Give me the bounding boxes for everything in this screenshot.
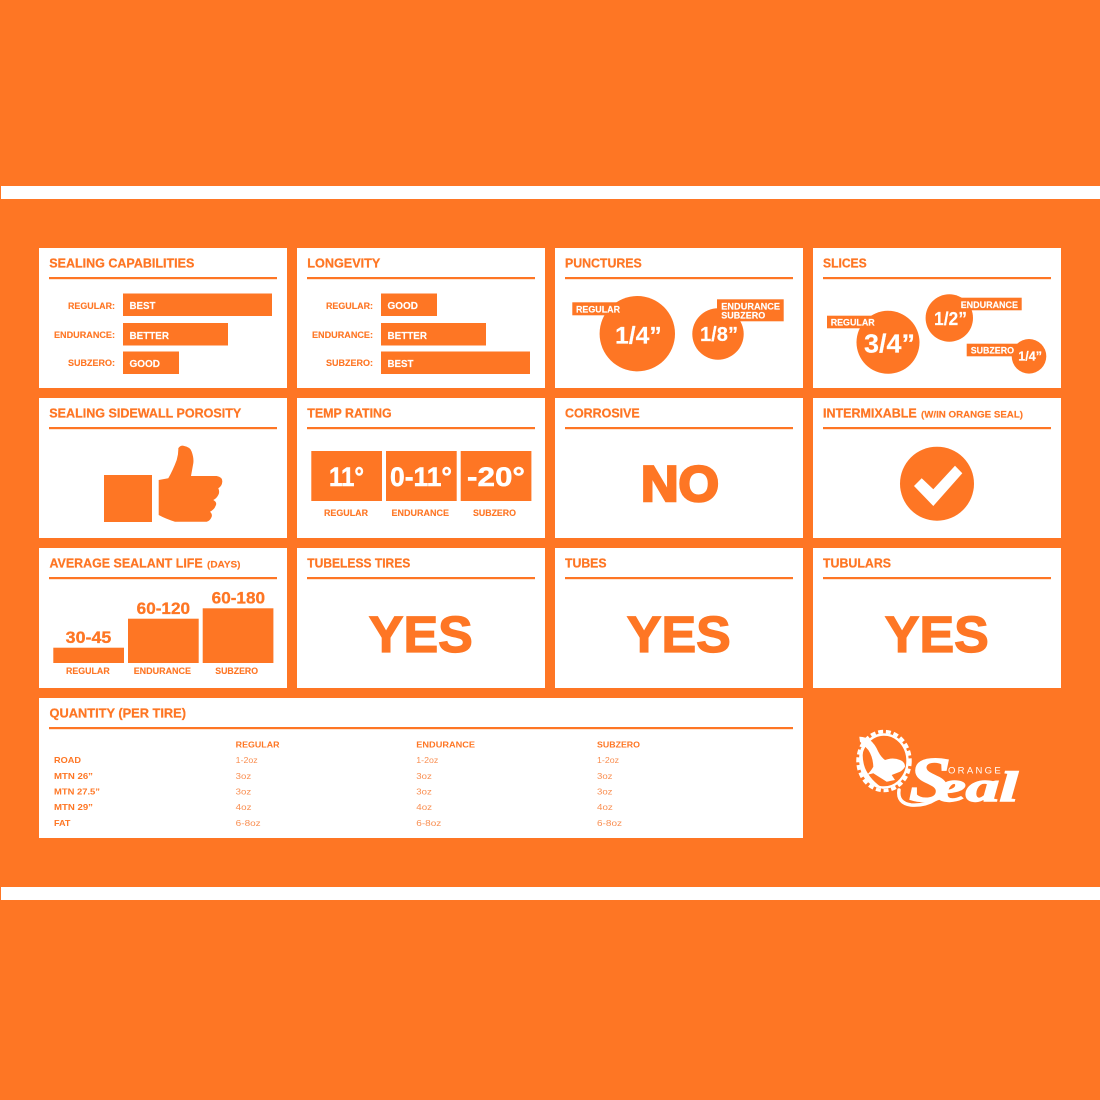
row: endurance better: ENDURANCE: — [312, 330, 373, 340]
heading: average sealant life: (DAYS) — [207, 560, 240, 570]
values: regular: 3oz — [236, 771, 251, 781]
circle: endurance and subzero 1/8 inch: 1/8” — [700, 324, 738, 346]
row labels: ROAD — [54, 755, 81, 765]
row: endurance better — [54, 323, 228, 346]
values: endurance: 1-2oz — [416, 755, 438, 765]
circle: endurance and subzero 1/8 inch: SUBZERO — [721, 311, 765, 321]
temp tile: endurance: 0-11° — [390, 462, 452, 492]
row: regular best: BEST — [130, 301, 156, 312]
wordmark: seal — [899, 744, 1019, 815]
temp tile: subzero — [461, 451, 531, 518]
heading: corrosive: CORROSIVE — [565, 406, 640, 420]
circle: endurance 1/2 inch — [926, 294, 1022, 342]
circle: regular 1/4 inch — [572, 296, 675, 371]
bar: regular: 30-45 — [66, 629, 111, 647]
bar: regular — [53, 629, 124, 676]
big answer: no: NO — [641, 456, 719, 512]
values: regular: 4oz — [236, 802, 252, 812]
table: quantity by tire type — [54, 739, 640, 828]
bar: subzero: SUBZERO — [215, 666, 258, 676]
values: regular: 6-8oz — [236, 818, 261, 828]
panel: sealing capabilities — [39, 248, 287, 388]
heading: intermixable: INTERMIXABLE — [823, 407, 917, 421]
row: regular good: GOOD — [388, 301, 418, 312]
values: endurance: 3oz — [416, 787, 432, 797]
bar chart: sealant life — [53, 589, 273, 676]
heading: longevity: LONGEVITY — [307, 256, 381, 270]
circle: subzero 1/4 inch: 1/4” — [1018, 350, 1042, 364]
panel: slices — [813, 248, 1061, 388]
logo: Orange Seal — [858, 732, 1019, 815]
bar: endurance: ENDURANCE — [134, 666, 191, 676]
panel: tubulars — [813, 548, 1061, 688]
temp tile: regular: 11° — [329, 462, 364, 492]
row labels: MTN 27.5” — [54, 787, 100, 797]
circle: regular 1/4 inch: REGULAR — [576, 305, 620, 315]
values: regular — [236, 755, 261, 828]
column headers: ENDURANCE — [416, 739, 475, 749]
heading: punctures: PUNCTURES — [565, 256, 642, 270]
heading: tubulars: TUBULARS — [823, 556, 891, 570]
row: subzero best: SUBZERO: — [326, 358, 373, 368]
row: regular good — [326, 294, 437, 316]
wordmark: seal: S — [909, 744, 951, 815]
circle: endurance and subzero 1/8 inch: ENDURANCE — [721, 301, 780, 311]
values: endurance — [416, 755, 441, 828]
heading: average sealant life: AVERAGE SEALANT LIFE — [50, 556, 203, 570]
circle: regular 3/4 inch: REGULAR — [831, 317, 875, 327]
panel: average sealant life — [39, 548, 287, 688]
heading: slices: SLICES — [823, 256, 867, 270]
values: subzero: 1-2oz — [597, 755, 619, 765]
panel: sealing sidewall porosity — [39, 398, 287, 538]
heading: intermixable: (W/IN ORANGE SEAL) — [921, 410, 1023, 421]
bar: endurance: 60-120 — [137, 600, 190, 618]
temp tile: endurance — [386, 451, 457, 518]
row: subzero best — [326, 352, 530, 374]
heading: quantity per tire: QUANTITY (PER TIRE) — [50, 706, 186, 720]
panel: corrosive — [555, 398, 803, 538]
temp tile: regular — [311, 451, 382, 518]
heading: sealing capabilities: SEALING CAPABILITIES — [49, 256, 194, 270]
temp tile: subzero: SUBZERO — [473, 508, 516, 518]
bar: regular: REGULAR — [66, 666, 110, 676]
big answer: yes: YES — [627, 606, 731, 663]
row: regular best: REGULAR: — [68, 301, 115, 311]
icon: check mark circle — [900, 447, 974, 521]
panel: temp rating — [297, 398, 545, 538]
wordmark: orange: ORANGE — [948, 766, 1001, 776]
row: subzero good: GOOD — [130, 359, 160, 370]
bar: endurance — [128, 600, 199, 676]
circle: regular 1/4 inch: 1/4” — [615, 322, 662, 349]
column headers: SUBZERO — [597, 739, 640, 749]
values: endurance: 3oz — [416, 771, 432, 781]
row labels: MTN 26” — [54, 771, 93, 781]
values: regular: 3oz — [236, 787, 251, 797]
row: endurance better: BETTER — [388, 331, 428, 342]
heading: temp rating: TEMP RATING — [307, 406, 392, 420]
big answer: yes: YES — [369, 606, 473, 663]
heading: sealing sidewall porosity: SEALING SIDEWALL POROSITY — [49, 406, 242, 420]
big answer: yes: YES — [885, 606, 989, 663]
row: endurance better: ENDURANCE: — [54, 330, 115, 340]
wordmark: seal: eal — [936, 765, 1019, 811]
panel: punctures — [555, 248, 803, 388]
panel: intermixable — [813, 398, 1061, 538]
values: subzero — [597, 755, 622, 828]
row: regular best — [68, 294, 272, 316]
temp tile: subzero: -20° — [467, 462, 525, 492]
heading: intermixable — [823, 407, 1023, 421]
panel: quantity per tire — [39, 698, 803, 838]
row: endurance better: BETTER — [130, 331, 170, 342]
panel: tubes — [555, 548, 803, 688]
circle: endurance 1/2 inch: 1/2” — [934, 309, 967, 329]
bar: subzero — [203, 589, 273, 676]
column headers: REGULAR — [236, 739, 280, 749]
temp tile: regular: REGULAR — [324, 508, 368, 518]
row labels: FAT — [54, 818, 71, 828]
heading: tubes: TUBES — [565, 556, 606, 570]
row labels: MTN 29” — [54, 802, 93, 812]
row: endurance better — [312, 323, 486, 346]
row: subzero best: BEST — [388, 359, 414, 370]
row labels — [54, 755, 100, 828]
circle: endurance 1/2 inch: ENDURANCE — [961, 300, 1018, 310]
bar: subzero: 60-180 — [212, 589, 265, 607]
column headers — [236, 739, 640, 749]
values: endurance: 4oz — [416, 802, 432, 812]
circle: regular 3/4 inch — [827, 311, 920, 374]
circle: subzero 1/4 inch — [967, 339, 1046, 374]
icon: gear ring with seal — [858, 732, 910, 790]
circle: endurance and subzero 1/8 inch — [692, 299, 784, 360]
values: subzero: 3oz — [597, 771, 612, 781]
panel: longevity — [297, 248, 545, 388]
row: regular good: REGULAR: — [326, 301, 373, 311]
panel: tubeless tires — [297, 548, 545, 688]
values: subzero: 6-8oz — [597, 818, 622, 828]
temp tile: endurance: ENDURANCE — [392, 508, 449, 518]
heading: tubeless tires: TUBELESS TIRES — [307, 556, 410, 570]
values: endurance: 6-8oz — [416, 818, 441, 828]
values: subzero: 4oz — [597, 802, 613, 812]
circle: subzero 1/4 inch: SUBZERO — [971, 346, 1014, 356]
values: regular: 1-2oz — [236, 755, 258, 765]
row: subzero good: SUBZERO: — [68, 358, 115, 368]
icon: thumbs up — [104, 446, 222, 522]
row: subzero good — [68, 352, 179, 374]
values: subzero: 3oz — [597, 787, 612, 797]
circle: regular 3/4 inch: 3/4” — [864, 328, 915, 358]
